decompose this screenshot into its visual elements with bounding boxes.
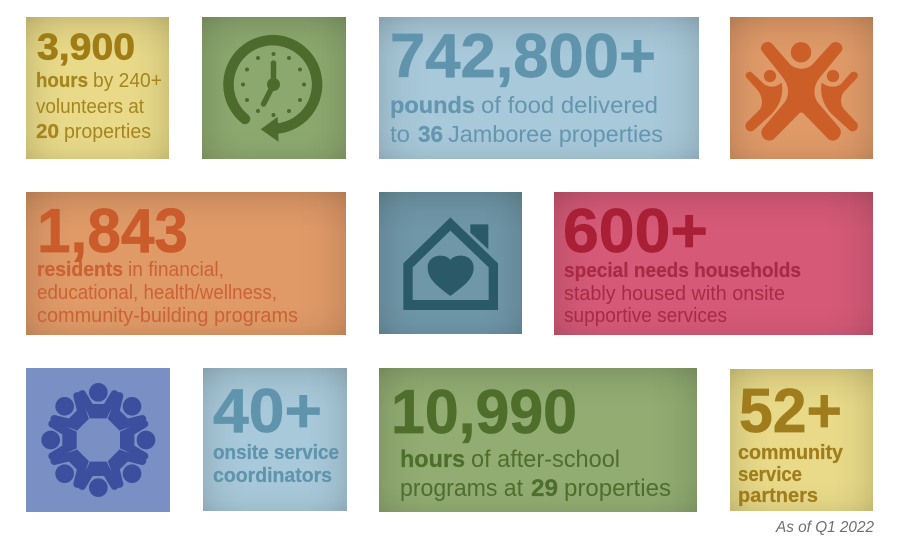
description: after-school programs: of after-school bbox=[471, 446, 620, 473]
description: after-school programs: programs at bbox=[400, 475, 523, 502]
panel: 40+ service coordinators bbox=[203, 368, 347, 511]
description: volunteer hours bbox=[36, 70, 162, 143]
description: food delivered bbox=[390, 92, 663, 147]
stat: 40+: 40+ bbox=[213, 377, 322, 446]
description: coordinators bbox=[213, 442, 339, 487]
panel: 52+ community partners bbox=[730, 369, 873, 511]
description: service partners bbox=[738, 442, 844, 507]
description: food delivered: 36 bbox=[418, 121, 443, 147]
description: resident programs: residents bbox=[37, 259, 123, 281]
description: service partners: service bbox=[738, 464, 802, 486]
description: supportive housing bbox=[564, 260, 801, 327]
description: supportive housing: stably housed with onsite bbox=[564, 283, 785, 305]
description: resident programs: community-building programs bbox=[37, 305, 298, 327]
description: after-school programs: properties bbox=[564, 475, 671, 502]
icon: circle of people bbox=[41, 383, 155, 497]
description: food delivered: Jamboree properties bbox=[448, 121, 663, 147]
description: coordinators: coordinators bbox=[213, 465, 332, 487]
icon: house with heart bbox=[403, 217, 498, 310]
description: resident programs: educational, health/wellness, bbox=[37, 282, 277, 304]
description: volunteer hours: 20 bbox=[36, 121, 59, 143]
panel: house icon bbox=[379, 192, 522, 334]
description: volunteer hours: by 240+ bbox=[93, 70, 162, 92]
panel: people icon bbox=[730, 17, 873, 159]
stat: 600+: 600+ bbox=[563, 197, 708, 266]
panel: 742,800+ pounds of food bbox=[379, 17, 699, 159]
description: after-school programs: hours bbox=[400, 446, 465, 473]
description: supportive housing: supportive services bbox=[564, 305, 727, 327]
description: service partners: community bbox=[738, 442, 844, 464]
panel: 1,843 residents bbox=[26, 192, 346, 335]
stat: 52+: 52+ bbox=[739, 377, 842, 446]
stat: 10,990: 10,990 bbox=[391, 378, 577, 447]
stat: 3,900: 3,900 bbox=[37, 26, 135, 68]
description: supportive housing: special needs households bbox=[564, 260, 801, 282]
icon: clock with arrow bbox=[228, 40, 317, 142]
panel: clock icon bbox=[202, 17, 346, 159]
description: volunteer hours: hours bbox=[36, 70, 88, 92]
description: service partners: partners bbox=[738, 485, 818, 507]
panel: 3,900 volunteer hours bbox=[26, 17, 169, 159]
description: resident programs: in financial, bbox=[128, 259, 224, 281]
description: volunteer hours: volunteers at bbox=[36, 96, 144, 118]
description: volunteer hours: properties bbox=[64, 121, 151, 143]
description: after-school programs: 29 bbox=[531, 475, 558, 502]
panel: 10,990 after-school hours bbox=[379, 368, 697, 512]
stat: 1,843: 1,843 bbox=[37, 197, 188, 266]
panel: 600+ special needs households bbox=[554, 192, 873, 335]
description: food delivered: pounds bbox=[390, 92, 475, 118]
description: food delivered: to bbox=[390, 121, 410, 147]
description: food delivered: of food delivered bbox=[481, 92, 658, 118]
panel: community circle icon bbox=[26, 368, 170, 512]
description: resident programs bbox=[37, 259, 298, 327]
description: coordinators: onsite service bbox=[213, 442, 339, 464]
icon: three jumping figures bbox=[746, 43, 857, 140]
footnote: date: As of Q1 2022 bbox=[775, 519, 874, 536]
stat: 742,800+: 742,800+ bbox=[390, 22, 656, 91]
description: after-school programs bbox=[400, 446, 671, 502]
